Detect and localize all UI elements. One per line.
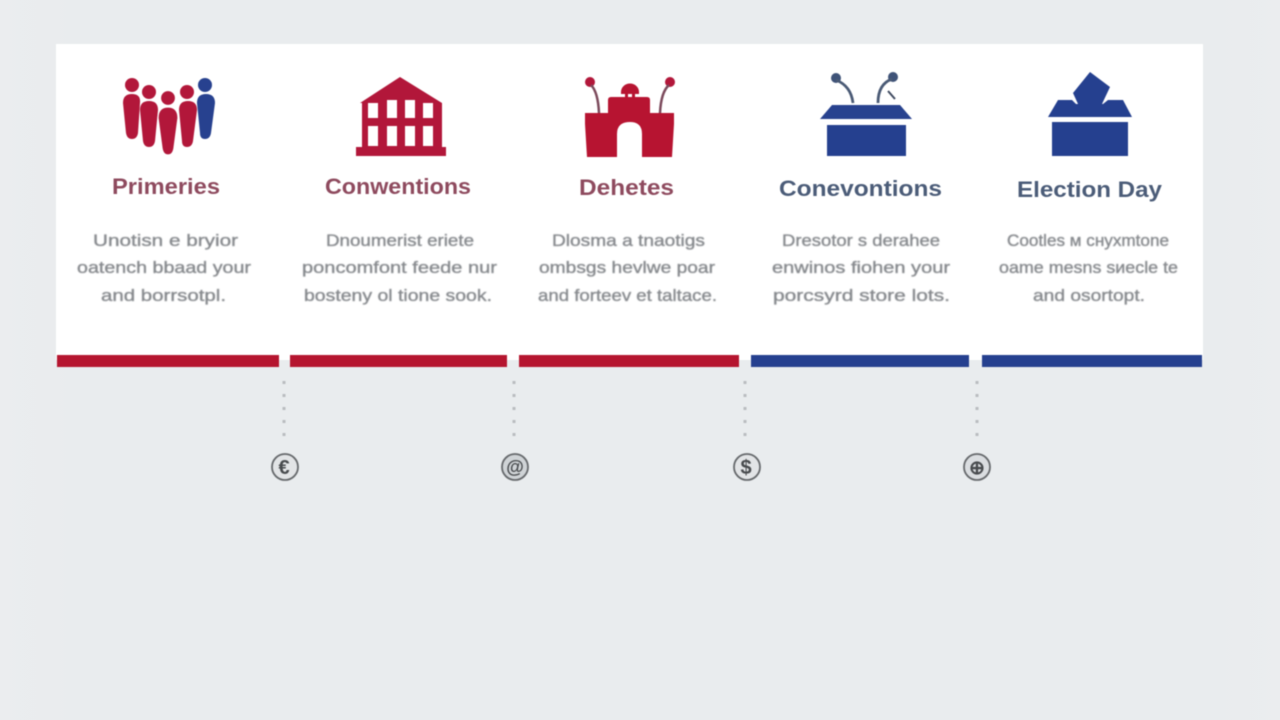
heading: Conwentions: Conwentions xyxy=(325,174,471,199)
text block: Election Day description: Cootles м cнyxmtone xyxy=(1007,231,1169,250)
heading: Conevontions: Conevontions xyxy=(779,176,942,201)
bar: Conevontions xyxy=(751,355,969,367)
text block: Primeries description: Unotisn e bryior xyxy=(93,231,238,250)
text block: Dehetes description: Dlosma a tnaotigs xyxy=(552,231,705,250)
text block: Primeries description xyxy=(77,231,251,305)
text block: Conwentions description: poncomfont feede nur xyxy=(302,258,497,277)
stage 3: Debates xyxy=(519,77,739,367)
bar: Election Day xyxy=(982,355,1202,367)
connector: dotted line and marker 3 xyxy=(734,381,760,480)
text block: Primeries description: and borrsotpl. xyxy=(101,286,226,305)
stage 4: Conevontions xyxy=(751,72,969,367)
icon: group of people xyxy=(123,78,215,155)
text block: Election Day description: oame mesns sиecle te xyxy=(999,258,1178,277)
stage 2: Conventions xyxy=(290,77,507,367)
text block: Election Day description xyxy=(999,231,1178,305)
connector: dotted line and marker 2: @ xyxy=(506,457,524,477)
panel: timeline card xyxy=(56,44,1203,367)
text block: Conwentions description: Dnoumerist eriete xyxy=(326,231,474,250)
stage 1: Primaries xyxy=(57,78,279,367)
text block: Primeries description: oatench bbaad your xyxy=(77,258,251,277)
connector: dotted line and marker 3: $ xyxy=(740,457,752,479)
stage 5: Election Day xyxy=(982,72,1202,367)
connector: dotted line and marker 4: ⊕ xyxy=(969,458,985,479)
text block: Conevontions description: enwinos fiohen your xyxy=(772,258,950,277)
text block: Conevontions description xyxy=(772,231,950,305)
bar: Dehetes xyxy=(519,355,739,367)
text block: Conwentions description: bosteny ol tione sook. xyxy=(304,286,492,305)
text block: Dehetes description: and forteev et taltace. xyxy=(538,286,717,305)
text block: Conevontions description: porcsyrd store lots. xyxy=(773,286,950,305)
heading: Dehetes: Dehetes xyxy=(579,175,674,200)
connector: dotted line and marker 1 xyxy=(272,381,298,480)
icon: ballot box xyxy=(1048,72,1132,156)
connector: dotted line and marker 1: € xyxy=(278,457,290,479)
text block: Dehetes description: ombsgs hevlwe poar xyxy=(539,258,715,277)
text block: Conevontions description: Dresotor s derahee xyxy=(782,231,940,250)
icon: lectern with microphones xyxy=(820,72,912,156)
connector: dotted line and marker 4 xyxy=(964,381,990,480)
text block: Dehetes description xyxy=(538,231,717,305)
bar: Primeries xyxy=(57,355,279,367)
icon: columned building xyxy=(356,77,446,156)
heading: Election Day: Election Day xyxy=(1017,177,1163,202)
bar: Conwentions xyxy=(290,355,507,367)
heading: Primeries: Primeries xyxy=(112,174,220,199)
text block: Election Day description: and osortopt. xyxy=(1033,286,1145,305)
connector: dotted line and marker 2 xyxy=(502,381,528,480)
text block: Conwentions description xyxy=(302,231,497,305)
icon: debate podium with microphones xyxy=(585,77,675,157)
